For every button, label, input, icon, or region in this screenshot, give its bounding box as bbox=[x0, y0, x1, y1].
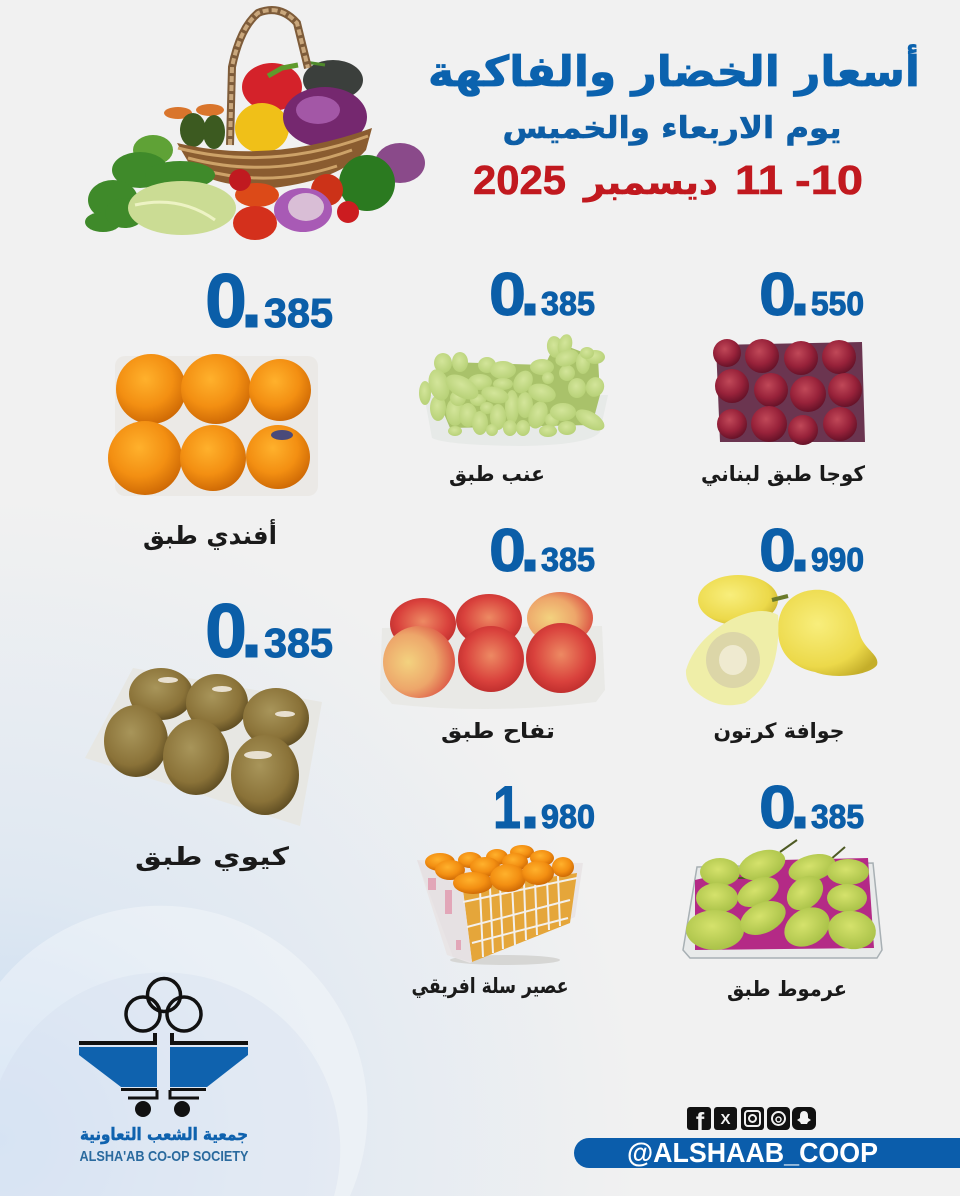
label: جوافة كرتون bbox=[714, 719, 844, 743]
product: pears bbox=[683, 774, 882, 1001]
social icons bbox=[687, 1107, 816, 1136]
label: كوجا طبق لبناني bbox=[701, 462, 866, 486]
logo arabic name: جمعية الشعب التعاونية bbox=[80, 1125, 248, 1145]
logo cart bbox=[79, 1033, 248, 1117]
icon: facebook: f bbox=[696, 1108, 705, 1136]
label: تفاح طبق bbox=[441, 719, 555, 743]
price: 0.385 bbox=[759, 774, 864, 841]
label: عنب طبق bbox=[449, 462, 545, 486]
price: 0.550: 550 bbox=[811, 285, 864, 322]
price: 1.980: 980 bbox=[541, 798, 595, 835]
product: guava bbox=[686, 517, 877, 743]
price: 0.990: 990 bbox=[811, 541, 864, 578]
subtitle: date: ديسمبر bbox=[582, 163, 718, 203]
price: 1.980 bbox=[493, 774, 595, 841]
price: 0.990: 0 bbox=[759, 517, 796, 584]
handle bar bbox=[574, 1137, 960, 1168]
price: 1.980: 1 bbox=[493, 774, 521, 841]
label: عصير سلة افريقي bbox=[412, 974, 568, 998]
label: أفندي طبق bbox=[143, 519, 277, 551]
price: 0.385: 385 bbox=[264, 290, 333, 336]
icon: instagram bbox=[741, 1107, 764, 1130]
price: 0.385 bbox=[205, 259, 333, 344]
price: 0.385: 385 bbox=[541, 285, 595, 322]
handle text: @ALSHAAB_COOP bbox=[627, 1137, 878, 1168]
price: 0.550 bbox=[759, 261, 864, 328]
logo rings bbox=[126, 978, 201, 1031]
product: grapes bbox=[419, 261, 608, 486]
subtitle: date bbox=[473, 157, 863, 203]
product: apples bbox=[380, 517, 605, 743]
logo english name: ALSHA'AB CO-OP SOCIETY bbox=[80, 1148, 248, 1165]
label: عرموط طبق bbox=[727, 977, 847, 1001]
icon: snapchat bbox=[792, 1107, 816, 1130]
price: 0.385 bbox=[205, 589, 333, 674]
price: 0.385: 0 bbox=[489, 261, 526, 328]
price: 0.385: 0 bbox=[489, 517, 526, 584]
subtitle: date: 2025 bbox=[473, 157, 566, 203]
price: 0.385 bbox=[489, 261, 595, 328]
product: mandarin bbox=[108, 259, 333, 551]
icon: threads bbox=[767, 1107, 790, 1130]
price: 0.385: 385 bbox=[541, 541, 595, 578]
icon: x: X bbox=[720, 1111, 731, 1128]
subtitle: date: -10 bbox=[795, 157, 863, 203]
price: 0.990 bbox=[759, 517, 864, 584]
logo: Alsha'ab Co-op Society bbox=[79, 978, 248, 1165]
price: 0.385: 385 bbox=[264, 620, 333, 666]
label: كيوي طبق bbox=[135, 842, 290, 872]
price: 0.385: 0 bbox=[205, 259, 247, 344]
illustration: vegetable basket bbox=[85, 10, 425, 240]
subtitle: days: يوم الاربعاء والخميس bbox=[502, 111, 842, 146]
product: juice oranges crate bbox=[412, 774, 595, 998]
product: plums bbox=[701, 261, 866, 486]
price: 0.550: 0 bbox=[759, 261, 796, 328]
price: 0.385: 0 bbox=[205, 589, 247, 674]
product: kiwi bbox=[85, 589, 333, 872]
price: 0.385: 0 bbox=[759, 774, 796, 841]
subtitle: date: 11 bbox=[735, 157, 783, 203]
price: 0.385: 385 bbox=[811, 798, 864, 835]
title: أسعار الخضار والفاكهة bbox=[428, 44, 920, 97]
price: 0.385 bbox=[489, 517, 595, 584]
